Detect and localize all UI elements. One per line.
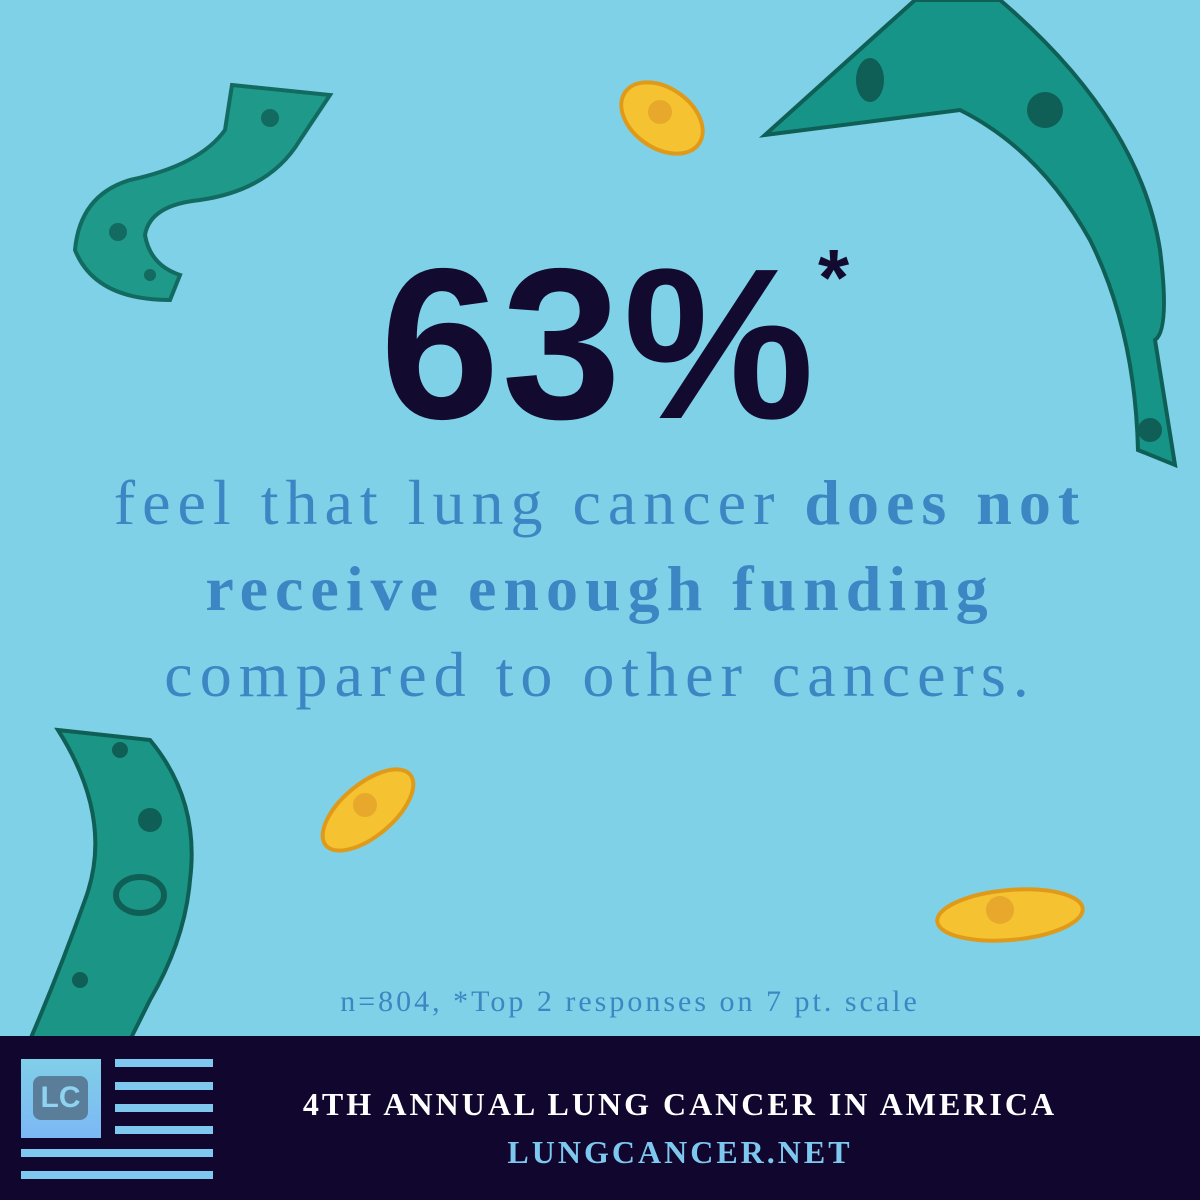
footnote: n=804, *Top 2 responses on 7 pt. scale	[340, 985, 920, 1018]
icon: coin top	[608, 68, 716, 168]
statement text: receive enough funding	[205, 553, 995, 624]
footer title: 4TH ANNUAL LUNG CANCER IN AMERICA	[303, 1086, 1057, 1122]
statement text: compared to other cancers.	[164, 639, 1036, 710]
logo	[21, 1059, 213, 1179]
icon: LC badge	[21, 1059, 101, 1138]
icon: LC badge: LC	[40, 1081, 80, 1114]
asterisk: *	[818, 233, 849, 322]
icon: bill top-left	[75, 85, 330, 300]
icon: bill bottom-left	[30, 730, 192, 1040]
footer url: LUNGCANCER.NET	[507, 1134, 853, 1170]
icon: coin middle	[309, 755, 427, 865]
big stat: 63%	[380, 223, 816, 464]
statement text	[114, 467, 1086, 710]
statement text: feel that lung cancer does not	[114, 467, 1086, 538]
icon: bill top-right	[765, 0, 1175, 465]
footer bar	[0, 1036, 1200, 1200]
icon: coin right	[935, 884, 1085, 946]
